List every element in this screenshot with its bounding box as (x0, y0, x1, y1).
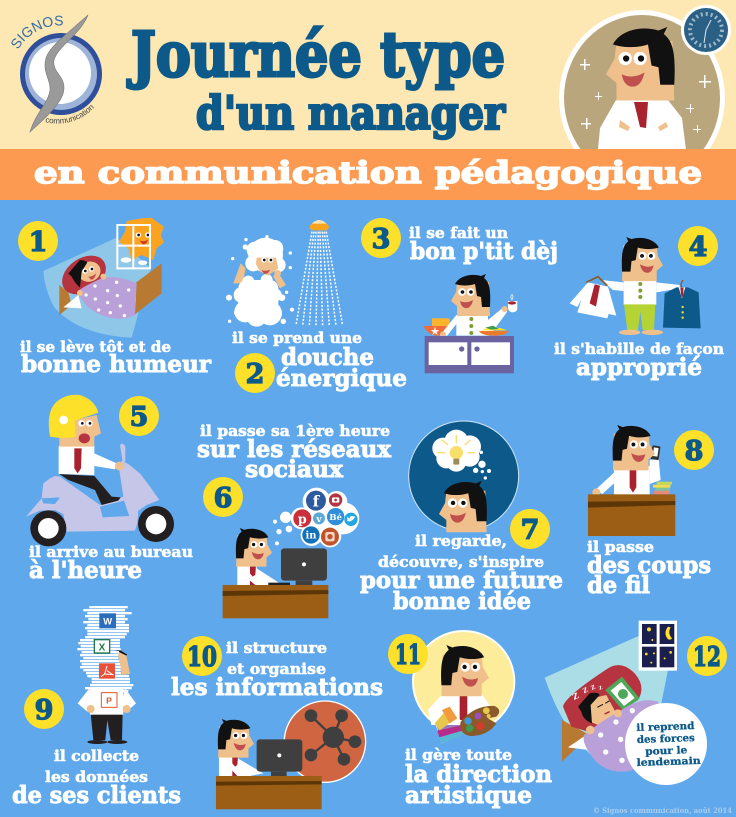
number badge 5 (119, 396, 159, 436)
caption 6: sur les réseaux (197, 436, 391, 463)
character head 3 (451, 274, 490, 316)
caption 4: approprié (576, 354, 702, 381)
portrait of the manager (559, 10, 725, 149)
caption 10 (171, 639, 383, 701)
illustration: carrying a pile of documents: P (106, 695, 112, 705)
logo: Signos communication: communication (46, 105, 94, 124)
number badge 9: 9 (35, 695, 53, 726)
caption 7: il regarde, (415, 532, 507, 550)
number badge 3: 3 (372, 224, 390, 255)
number badge 7: 7 (521, 515, 539, 546)
caption 3: bon p'tit dèj (410, 238, 558, 265)
panel: step 9 (12, 606, 181, 809)
caption 9: il collecte (54, 747, 139, 765)
number badge 9 (24, 689, 64, 729)
number badge 8: 8 (685, 436, 703, 467)
caption 6: sociaux (245, 456, 343, 483)
panel: step 7 (360, 421, 563, 615)
number badge 5: 5 (130, 402, 148, 433)
panel: step 12 (545, 621, 727, 785)
panel: step 3 (361, 218, 558, 373)
logo: Signos communication (11, 14, 102, 133)
caption 9: de ses clients (12, 782, 181, 809)
illustration: sleeping at night: Z (571, 690, 580, 702)
panel: step 4 (554, 226, 724, 381)
number badge 8 (674, 430, 714, 470)
panel: step 5 (26, 395, 193, 584)
number badge 12 (687, 636, 727, 676)
panel: step 2 (226, 220, 407, 393)
caption 3 (409, 224, 558, 265)
caption 5: à l'heure (29, 557, 142, 584)
panel: step 8 (587, 425, 714, 599)
illustration: social networks at the desk: f (313, 493, 321, 511)
logo: Signos communication: SIGNOS (11, 16, 63, 48)
character head 11 (441, 645, 489, 696)
callout bubble: il reprend (636, 721, 695, 734)
character head 8 (613, 425, 655, 470)
illustration: waking up in bed (43, 218, 164, 338)
caption 11: artistique (405, 782, 532, 809)
caption 4 (554, 340, 724, 381)
number badge 11: 11 (395, 640, 421, 671)
number badge 11 (388, 634, 428, 674)
caption 9 (12, 747, 181, 809)
title: Journée type (127, 18, 505, 91)
caption 2: douche (281, 344, 374, 371)
illustration: choosing clothes (570, 277, 701, 335)
panel: step 1 (18, 218, 212, 378)
number badge 10: 10 (187, 642, 217, 673)
illustration: art director with palette (413, 631, 514, 743)
number badge 2 (235, 353, 275, 393)
caption 1 (20, 338, 212, 378)
illustration: social networks at the desk: p (298, 511, 307, 526)
callout bubble (625, 703, 707, 785)
panel: step 11 (388, 631, 552, 809)
caption 6: il passe sa 1ère heure (200, 422, 390, 440)
caption 10: les informations (171, 674, 383, 701)
number badge 2: 2 (246, 359, 264, 390)
character head 6 (236, 528, 272, 567)
orange banner: en communication pédagogique (34, 156, 702, 191)
callout bubble: lendemain (636, 756, 702, 769)
number badge 6: 6 (214, 483, 232, 514)
caption 11 (405, 746, 552, 809)
copyright: © Signos communication, août 2014 (593, 806, 732, 815)
title (127, 18, 506, 140)
caption 8: des coups (587, 552, 711, 579)
background: blue body (0, 200, 736, 817)
number badge 1 (18, 221, 58, 261)
caption 2: il se prend une (232, 329, 362, 347)
caption 7: découvre, s'inspire (378, 553, 544, 571)
number badge 1: 1 (29, 227, 47, 258)
title: d'un manager (196, 86, 506, 140)
character head 10 (218, 719, 254, 758)
illustration: carrying a pile of documents: W (103, 616, 112, 626)
caption 3: il se fait un (409, 224, 508, 242)
icon: clock (681, 5, 731, 55)
panel: step 6 (197, 422, 391, 618)
caption 1: il se lève tôt et de (20, 338, 171, 356)
illustration: carrying a pile of documents (77, 606, 136, 744)
illustration: social networks at the desk (223, 488, 359, 618)
character head 7 (439, 481, 487, 532)
orange banner (0, 149, 736, 200)
illustration: breakfast at the counter (424, 294, 517, 373)
background: cream header (0, 0, 736, 150)
illustration: social networks at the desk: in (305, 531, 317, 542)
caption 2 (232, 329, 407, 392)
callout bubble: pour le (645, 745, 687, 758)
caption 5 (29, 543, 193, 584)
number badge 4 (678, 226, 718, 266)
caption 8: de fil (587, 572, 650, 599)
number badge 10 (182, 636, 222, 676)
illustration: on the phone at the desk (588, 445, 675, 536)
number badge 3 (361, 218, 401, 258)
caption 9: les données (45, 768, 148, 786)
number badge 7 (510, 509, 550, 549)
panel: step 10 (171, 636, 383, 809)
illustration: riding a scooter (26, 395, 174, 546)
caption 1: bonne humeur (21, 351, 212, 378)
illustration: sleeping at night: Z (598, 685, 604, 692)
caption 7 (360, 532, 563, 615)
caption 7: bonne idée (393, 588, 531, 615)
callout bubble: des forces (637, 733, 695, 746)
caption 8 (587, 538, 711, 599)
caption 7: pour une future (360, 567, 563, 594)
caption 11: il gère toute (405, 746, 512, 764)
caption 8: il passe (587, 538, 654, 556)
illustration: sleeping at night: Z (590, 685, 597, 692)
illustration: sleeping at night: Z (581, 686, 589, 695)
caption 6 (197, 422, 391, 483)
illustration: social networks at the desk: v (315, 514, 322, 525)
caption 11: la direction (405, 761, 552, 788)
character head 4 (622, 237, 663, 281)
illustration: foamy shower (226, 220, 343, 327)
illustration: social networks at the desk: Bé (329, 512, 343, 523)
illustration: carrying a pile of documents: X (99, 642, 106, 653)
number badge 4: 4 (689, 232, 707, 263)
caption 4: il s'habille de façon (554, 340, 724, 358)
number badge 12: 12 (693, 642, 721, 673)
caption 10: et organise (227, 660, 326, 678)
illustration: structuring information at the computer (216, 701, 366, 809)
illustration: sleeping at night (545, 621, 677, 772)
caption 10: il structure (226, 639, 327, 657)
caption 5: il arrive au bureau (29, 543, 193, 561)
number badge 6 (203, 477, 243, 517)
illustration: idea bubble in a circle (409, 421, 519, 531)
caption 2: énergique (276, 365, 407, 392)
